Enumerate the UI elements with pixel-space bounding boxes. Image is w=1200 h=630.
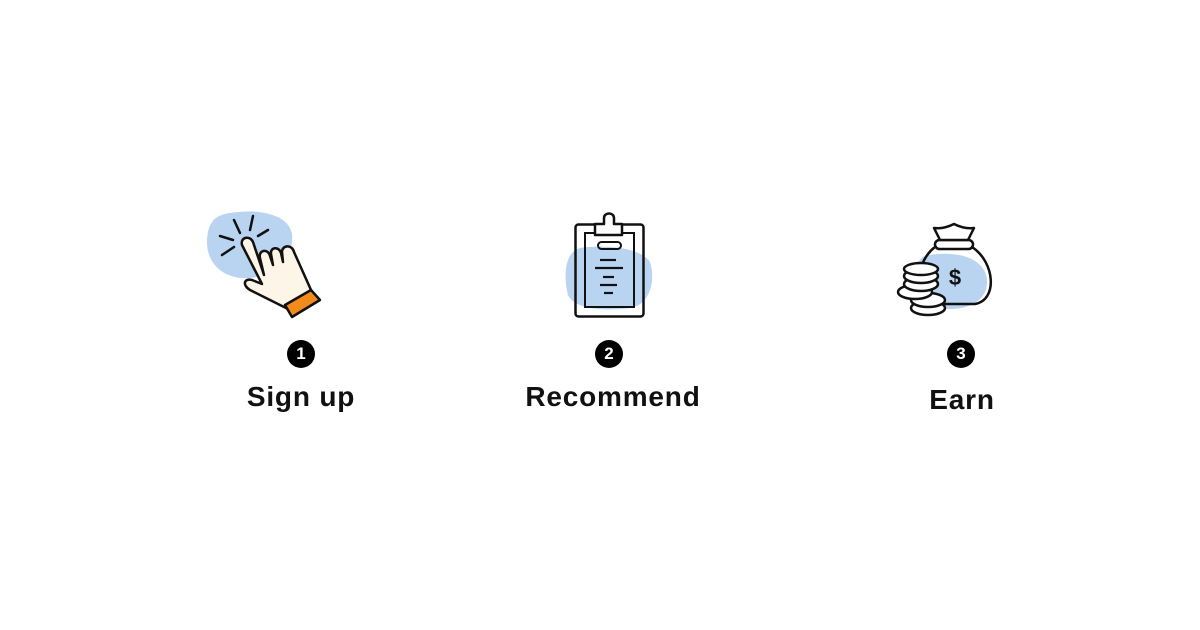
label: Recommend: Recommend [525, 381, 701, 412]
step number 3: 3 [956, 344, 966, 363]
step number 1 [287, 340, 315, 368]
icon: hand pointer [207, 211, 320, 317]
label: Sign up: Sign up [247, 381, 355, 412]
label: Earn: Earn [929, 384, 995, 415]
step number 2 [595, 340, 623, 368]
icon: money bag with coins [898, 224, 991, 315]
step number 3 [947, 340, 975, 368]
icon: money bag with coins: $ [949, 265, 961, 290]
step number 2: 2 [604, 344, 614, 363]
step number 1: 1 [296, 344, 306, 363]
icon: clipboard [566, 214, 652, 316]
